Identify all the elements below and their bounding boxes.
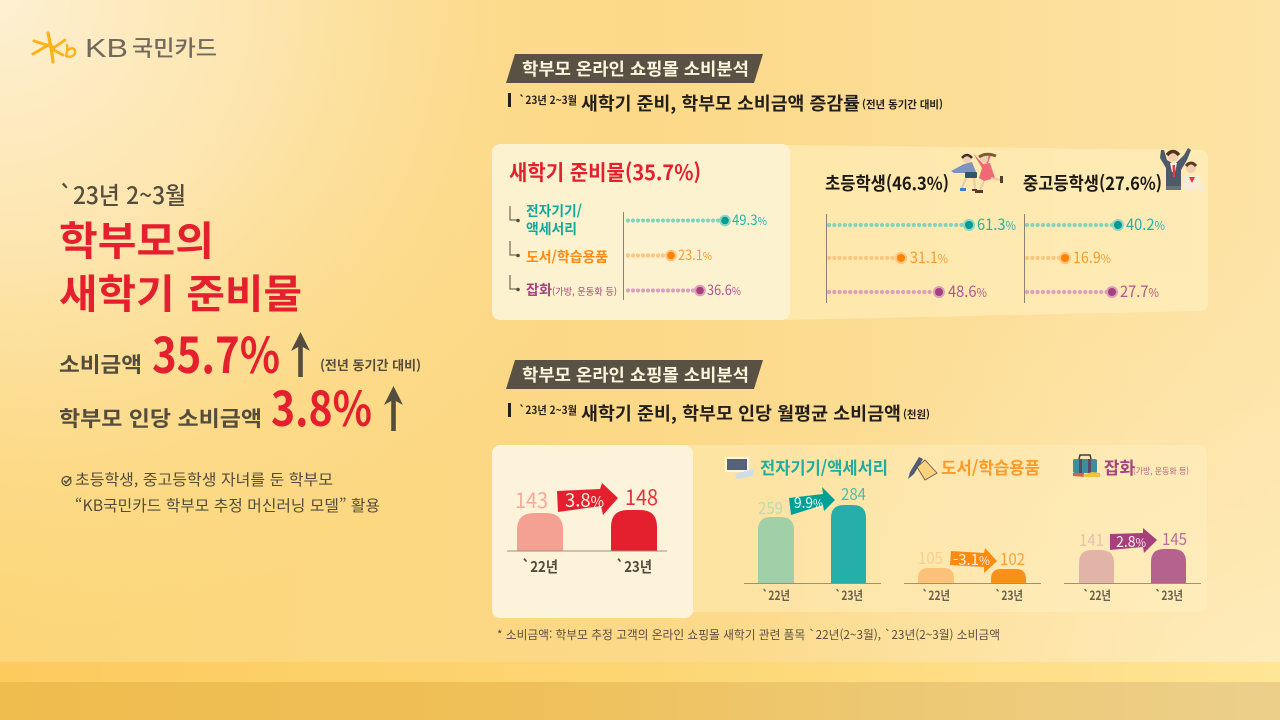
dot chart: 잡화 27.7% (1027, 280, 1159, 302)
dot chart: 잡화 48.6% (829, 280, 987, 302)
stat: spending up 35.7%: (전년 동기간 대비) (320, 355, 421, 374)
category labels: 액세서리 (526, 219, 577, 239)
arrow: 9.9% (789, 487, 835, 515)
category: 도서/학습용품: `22년 (922, 585, 950, 604)
category: 전자기기/액세서리: `22년 (762, 585, 790, 604)
column: 초등학생 (825, 153, 1016, 303)
icon: running children (951, 153, 1003, 193)
dot chart: 잡화 36.6% (628, 280, 741, 300)
bar 2023 (831, 505, 866, 583)
dot chart: 잡화 27.7%: 27.7% (1120, 280, 1159, 302)
stat: spending up 35.7% (59, 317, 421, 388)
arrow: 2.8%: 2.8% (1116, 531, 1146, 552)
main title: 학부모의 (59, 209, 214, 267)
arrow: -3.1%: -3.1% (953, 549, 990, 570)
stat: spending up 35.7%: 소비금액 (59, 349, 142, 379)
column: 중고등학생 (1023, 148, 1205, 303)
category: 도서/학습용품: 도서/학습용품 (941, 454, 1040, 479)
icon: KB star (33, 33, 75, 62)
dot chart: 전자기기 49.3%: 49.3% (732, 210, 767, 230)
note (62, 468, 380, 516)
stat: per-parent spending up 3.8%: 3.8% (271, 370, 372, 440)
icon: bag and shoes (1073, 455, 1100, 477)
bar 2022 (1079, 550, 1114, 583)
stat: per-parent spending up 3.8%: 학부모 인당 소비금액 (59, 403, 262, 433)
category: 잡화: `23년 (1155, 585, 1183, 604)
category: 전자기기/액세서리: `23년 (835, 585, 863, 604)
panel: total per-parent spending (492, 445, 693, 618)
dot chart: 전자기기 40.2% (1027, 213, 1165, 235)
logo text (85, 31, 217, 63)
heading: 중고등학생(27.6%) (1023, 170, 1162, 196)
logo: KB 국민카드 (33, 31, 217, 63)
note: 초등학생, 중고등학생 자녀를 둔 학부모 (75, 468, 333, 490)
category labels: 전자기기/ (526, 201, 583, 221)
dot chart: 도서 31.1% (829, 246, 948, 268)
category labels: (가방, 운동화 등) (552, 284, 617, 298)
arrow up (384, 386, 403, 431)
footnote: * 소비금액: 학부모 추정 고객의 온라인 쇼핑몰 새학기 관련 품목 `22년(2~3월), `23년(2~3월) 소비금액 (497, 626, 1000, 643)
subtitle: 새학기 준비, 학부모 인당 월평균 소비금액 (581, 400, 901, 426)
section header 1 (506, 54, 943, 116)
subtitle: `23년 2~3월 (519, 402, 577, 418)
panel: total per-parent spending: 143 (515, 485, 548, 515)
stat: spending up 35.7%: 35.7% (152, 317, 280, 388)
arrow: -3.1% (950, 548, 997, 573)
bar 2023 (991, 569, 1026, 583)
period heading: `23년 2~3월 (59, 176, 186, 211)
category labels: 도서/학습용품 (526, 247, 608, 267)
subtitle (508, 90, 943, 116)
heading: 초등학생(46.3%) (825, 170, 949, 196)
dot chart: 도서 16.9% (1027, 246, 1111, 268)
dot chart: 도서 23.1% (628, 245, 712, 265)
category: 잡화 (1064, 454, 1201, 604)
note: “KB국민카드 학부모 추정 머신러닝 모델” 활용 (75, 494, 380, 516)
left headline block (59, 176, 302, 320)
dot chart: 도서 23.1%: 23.1% (678, 245, 712, 265)
category: 전자기기/액세서리: 259 (758, 495, 783, 519)
arrow: 9.9%: 9.9% (794, 492, 823, 513)
category: 도서/학습용품: 102 (1000, 546, 1025, 570)
category: 전자기기/액세서리: 284 (841, 481, 866, 505)
subtitle: `23년 2~3월 (519, 92, 577, 108)
dot chart: 도서 31.1%: 31.1% (910, 246, 948, 268)
bar 2023 (611, 510, 657, 551)
panel: category bars background (680, 445, 1207, 612)
panel: total per-parent spending: `22년 (522, 556, 558, 577)
category: 도서/학습용품: 105 (918, 545, 943, 569)
category: 도서/학습용품: `23년 (995, 585, 1023, 604)
main title: 새학기 준비물 (59, 262, 302, 320)
icon: monitor (725, 457, 754, 479)
bar 2022 (758, 517, 794, 583)
logo text: 국민카드 (132, 31, 217, 63)
banner: 학부모 온라인 쇼핑몰 소비분석 (522, 361, 749, 386)
bar 2022 (918, 568, 954, 583)
banner: 학부모 온라인 쇼핑몰 소비분석 (522, 55, 749, 80)
logo text: KB (85, 33, 128, 63)
main title (59, 209, 302, 320)
category: 도서/학습용품 (904, 454, 1041, 604)
category: 잡화: 145 (1162, 526, 1187, 550)
dot chart: 잡화 48.6%: 48.6% (948, 280, 987, 302)
icon: book and pen (908, 457, 937, 480)
category: 잡화: 잡화 (1104, 454, 1135, 479)
panel: school-age breakdown background (786, 145, 1208, 320)
dot chart: 전자기기 61.3%: 61.3% (977, 213, 1016, 235)
category: 전자기기/액세서리 (725, 454, 888, 604)
arrow: 2.8% (1110, 528, 1157, 553)
category labels: 잡화 (526, 280, 552, 300)
panel: 새학기 준비물 (492, 144, 790, 320)
category labels (526, 201, 617, 300)
dot chart: 전자기기 49.3% (628, 210, 767, 230)
bar 2023 (1151, 549, 1186, 583)
category: 잡화: `22년 (1083, 585, 1111, 604)
icon: teen students (1160, 148, 1205, 191)
icon: check mark (62, 476, 71, 486)
tree connectors (510, 206, 517, 289)
category: 잡화: (가방, 운동화 등) (1133, 465, 1189, 477)
bottom band (0, 662, 1280, 720)
dot chart: 잡화 36.6%: 36.6% (707, 280, 741, 300)
category: 전자기기/액세서리: 전자기기/액세서리 (760, 454, 888, 479)
dot chart: 전자기기 40.2%: 40.2% (1126, 213, 1165, 235)
section header 2 (506, 360, 930, 426)
arrow up (291, 332, 310, 377)
bar 2022 (517, 513, 563, 551)
arrow: 3.8% (557, 483, 618, 515)
dot chart: 도서 16.9%: 16.9% (1073, 246, 1111, 268)
stat: per-parent spending up 3.8% (59, 370, 403, 440)
panel: total per-parent spending: 148 (625, 482, 658, 512)
panel: total per-parent spending: `23년 (616, 556, 652, 577)
category: 잡화: 141 (1079, 527, 1104, 551)
arrow: 3.8%: 3.8% (565, 486, 604, 513)
subtitle: 새학기 준비, 학부모 소비금액 증감률 (581, 90, 860, 116)
dot chart: 전자기기 61.3% (829, 213, 1016, 235)
subtitle: (천원) (903, 407, 930, 422)
subtitle: (전년 동기간 대비) (862, 97, 943, 112)
panel heading: 새학기 준비물(35.7%) (509, 157, 701, 187)
